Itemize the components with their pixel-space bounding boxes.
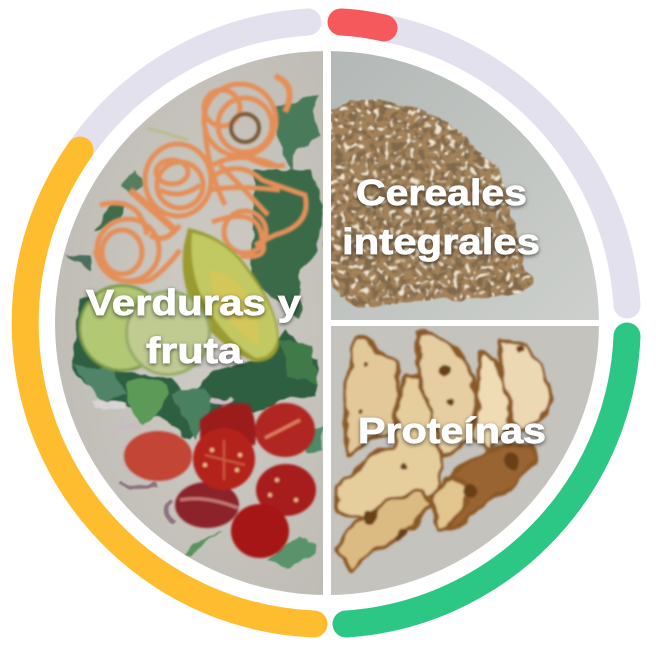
food: grilled chicken (336, 335, 552, 568)
plate quadrant: bottom right (331, 326, 606, 601)
ring segment: green (346, 336, 627, 624)
food: salad (65, 76, 323, 568)
carrot spirals (95, 76, 306, 282)
ring segment: red (341, 22, 384, 28)
food: whole grains (326, 100, 534, 308)
fruit and tomatoes (78, 228, 316, 558)
lime slices (77, 282, 150, 374)
tomatoes (124, 431, 192, 481)
ring segment: lavender top left (80, 22, 308, 150)
plate (50, 45, 606, 601)
char marks (355, 346, 522, 540)
label: Proteínas: Proteínas (358, 410, 546, 451)
ring segment: yellow (25, 150, 314, 624)
label: Cereales integrales: integrales (342, 221, 540, 262)
grain mound (326, 100, 534, 308)
label: Verduras y fruta: Verduras y (86, 282, 301, 323)
ring segment: lavender right (384, 28, 627, 305)
label: Cereales integrales (342, 172, 540, 262)
label: Cereales integrales: Cereales (356, 172, 527, 213)
avocado (183, 228, 279, 362)
plate quadrant: left (50, 45, 323, 601)
red onion (92, 398, 232, 522)
label: Verduras y fruta: fruta (146, 330, 243, 371)
chicken strips (336, 335, 552, 568)
plate quadrant: top right (331, 45, 606, 320)
stem (147, 128, 188, 140)
plate dividers (323, 40, 611, 610)
labels (86, 172, 546, 451)
salad greens (65, 95, 323, 568)
label: Verduras y fruta (86, 282, 301, 371)
